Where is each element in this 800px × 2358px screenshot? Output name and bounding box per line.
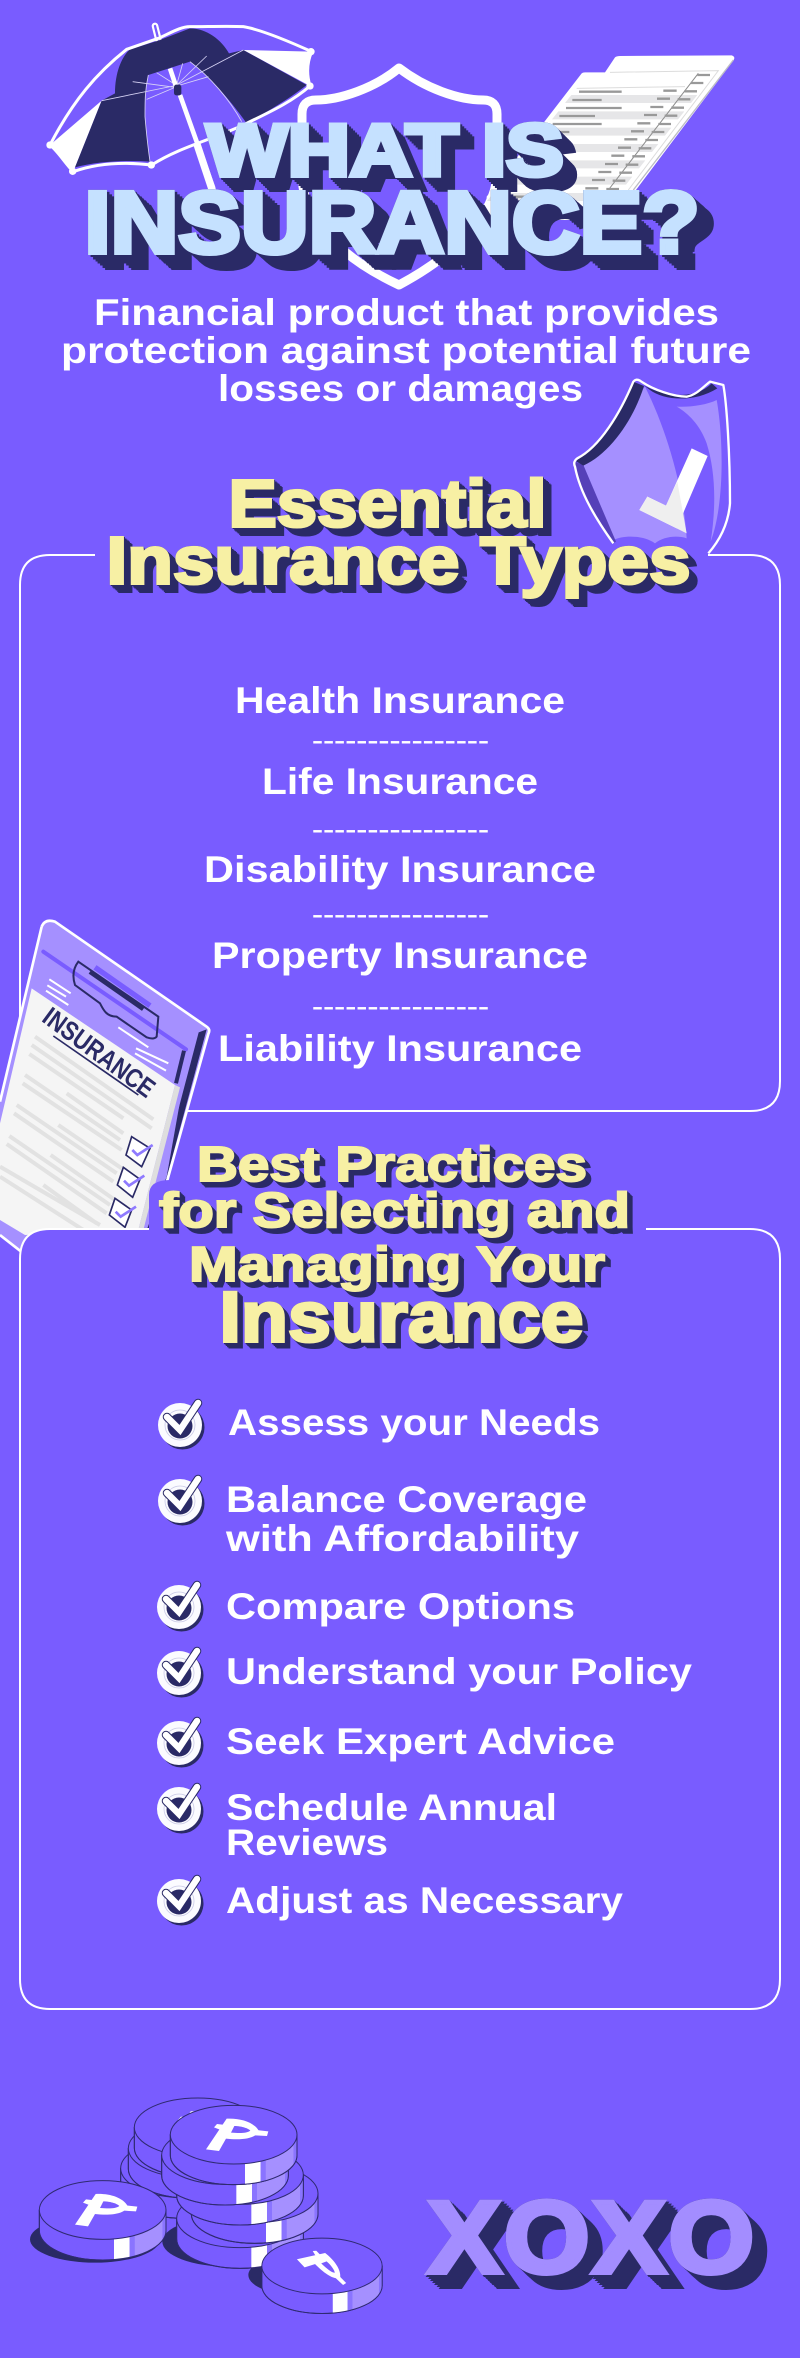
icon: shield with check: [574, 380, 730, 553]
icon: umbrella: [46, 26, 315, 203]
item: schedule line 1: Schedule Annual: [226, 1787, 557, 1828]
xoxo sign-off: XOXO: [428, 2181, 754, 2295]
item: balance line 1: Balance Coverage: [226, 1479, 587, 1520]
item: adjust: Adjust as Necessary: [226, 1880, 623, 1921]
panel background and outline: [20, 1229, 780, 2009]
heading: best practices: for Selecting and: [159, 1184, 630, 1238]
item: disability: Disability Insurance: [204, 849, 596, 890]
divider dashes: ----------------: [312, 996, 489, 1018]
item: liability: Liability Insurance: [218, 1028, 582, 1069]
checklist text: [225, 1402, 692, 1921]
icon: insurance clipboard: [0, 921, 209, 1253]
item: understand: Understand your Policy: [226, 1651, 692, 1692]
list: insurance types: [204, 680, 596, 1069]
subtitle line 2: protection against potential future: [61, 330, 751, 371]
divider dashes: ----------------: [312, 904, 489, 926]
subtitle: [61, 292, 751, 409]
item: property: Property Insurance: [212, 935, 588, 976]
heading: essential insurance types: [106, 466, 690, 598]
panel: essential insurance types: [20, 466, 780, 1111]
item: assess: Assess your Needs: [228, 1402, 600, 1443]
title: [84, 110, 700, 272]
heading: essential insurance types: Insurance Types: [106, 524, 690, 598]
checklist icons: [157, 1403, 204, 1926]
item: compare: Compare Options: [226, 1586, 575, 1627]
heading: best practices: Managing Your: [189, 1238, 605, 1292]
item: balance line 2: with Affordability: [225, 1518, 579, 1559]
divider dashes: ----------------: [312, 730, 489, 752]
subtitle line 3: losses or damages: [218, 368, 583, 409]
item: life: Life Insurance: [262, 761, 538, 802]
item: health: Health Insurance: [235, 680, 565, 721]
panel outline: [20, 555, 780, 1111]
clipboard label: INSURANCE: [37, 1001, 161, 1104]
heading: best practices: [159, 1138, 630, 1358]
subtitle line 1: Financial product that provides: [94, 292, 719, 333]
heading: best practices: Best Practices: [197, 1138, 587, 1192]
heading backing: [149, 1180, 300, 1260]
item: seek: Seek Expert Advice: [226, 1721, 615, 1762]
divider dashes: ----------------: [312, 820, 489, 842]
heading: essential insurance types: Essential: [228, 466, 546, 542]
title line: what is: WHAT IS: [206, 110, 564, 192]
icon: coin stacks: [30, 2098, 382, 2320]
panel: best practices: [20, 1138, 780, 2009]
title line: insurance: INSURANCE?: [84, 174, 700, 272]
icon: policy document: [487, 55, 734, 220]
item: schedule line 2: Reviews: [226, 1822, 388, 1863]
heading: best practices: Insurance: [220, 1278, 584, 1358]
icon: outline shield: [302, 68, 497, 285]
